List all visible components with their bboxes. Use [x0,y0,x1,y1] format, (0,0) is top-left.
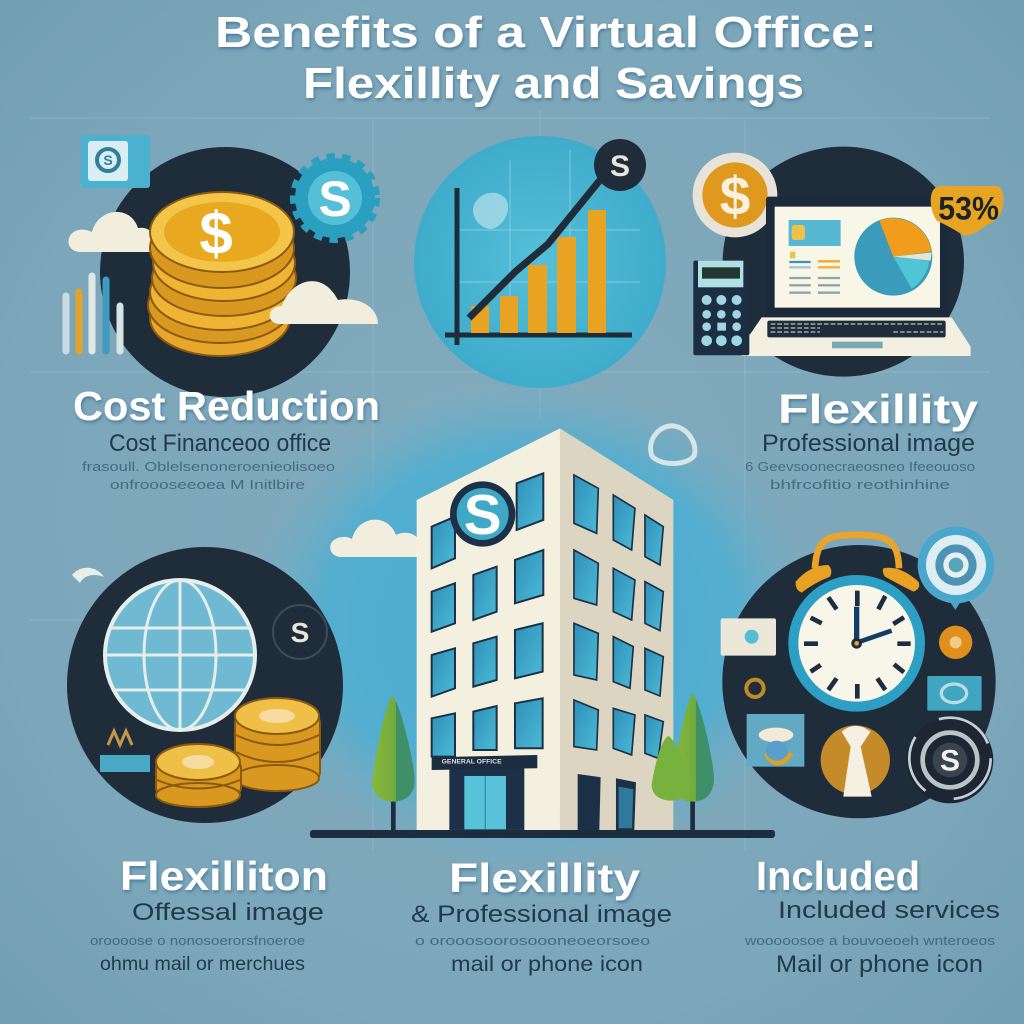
icon: calculator [693,261,749,355]
heading block: included services: Included services [778,897,1000,924]
icon: left coin stack [156,744,241,807]
icon: dollar coin [273,605,327,659]
icon: dollar coin: $ [720,165,750,227]
heading block: cost reduction [73,383,380,492]
icon: tie [821,725,890,797]
heading block: cost reduction: Cost Reduction [73,383,380,429]
title [215,8,877,108]
icon: dollar coin: S [291,617,309,648]
icon: teal card [927,676,982,711]
left windows [432,473,543,757]
heading block: flexibility centre: o orooosoorosoooneoeorsoeo [415,933,650,948]
title: Flexillity and Savings [303,59,804,108]
heading block: flexibility centre: & Professional image [411,901,672,928]
heading block: flexibility centre: Flexillity [449,855,640,901]
icon: swirl coin: S [940,745,960,778]
ground line [310,830,775,838]
panel: cost reduction icon [66,135,378,397]
heading block: cost reduction: Cost Financeoo office [109,430,331,457]
keyboard base [742,317,971,356]
teal circle [414,136,666,388]
tree left [372,696,415,830]
heading block: flexibility lower left: oroooose o nonosoerorsfnoeroe [90,933,305,948]
panel: building [245,380,815,870]
tower faces [417,428,560,830]
bars [471,210,606,333]
icon: small bars [66,276,120,351]
heading block: included services: wooooosoe a bouvoeoeh wnteroeos [744,933,996,948]
heading block: included services: Mail or phone icon [776,951,983,978]
icon: teal card [100,731,150,772]
icon: gear with dollar [295,158,375,238]
right windows [574,475,663,758]
heading block: flexibility top right: Flexillity [778,386,978,432]
icon: target pin [918,527,994,610]
heading block: flexibility centre: mail or phone icon [451,953,643,976]
icon: swirl coin [907,717,993,803]
icon: white card [721,618,776,656]
icon: right cloud [270,281,378,324]
icon: left cloud [68,212,155,252]
heading block: included services [744,853,1000,978]
title: Benefits of a Virtual Office: [215,8,877,57]
dark circle [67,547,343,823]
icon: globe [105,580,255,730]
screen list [789,220,841,293]
icon: dollar coin: S [610,150,630,183]
icon: orange coin [939,626,972,659]
icon: coin stack [148,192,296,356]
icon: laptop [742,197,971,356]
panel: growth chart icon [414,136,666,388]
icon: small leaf [72,568,104,583]
trend line [469,180,600,318]
icon: cap photo [747,714,804,767]
entrance [432,755,537,830]
icon: small card [81,135,150,188]
panel: cost reduction icon: $ [199,200,233,267]
panel: laptop icon [693,147,1003,377]
icon: dollar coin [594,139,646,191]
chart axes [445,188,632,345]
heading block: flexibility lower left: ohmu mail or merchues [100,954,305,975]
icon: alarm clock [793,535,920,707]
icon: small gold ring [746,680,764,697]
dark circle [100,147,350,397]
pie chart [854,218,932,296]
heading block: cost reduction: onfroooseeoea M Initlbire [110,477,305,492]
dark circle [723,147,964,377]
dark circle [722,545,996,818]
halo [245,380,815,870]
heading block: flexibility top right: Professional image [762,430,975,457]
icon: dollar sign badge [450,481,515,547]
icon: dollar coin [693,153,777,237]
icon: right coin stack [235,698,320,791]
percentage badge: 53% [938,190,999,226]
icon: gear with dollar: S [318,171,352,227]
heading block: included services: Included [756,853,920,899]
trees right [652,694,714,830]
heading block: flexibility centre [411,855,672,976]
icon: dollar sign badge: S [464,484,502,547]
heading block: cost reduction: frasoull. Oblelsenoneroenieolisoeo [82,459,335,474]
heading block: flexibility lower left [90,853,328,975]
icon: small card: S [103,152,113,168]
heading block: flexibility lower left: Offessal image [132,899,324,926]
heading block: flexibility top right: 6 Geevsoonecraeosneo Ifeeouoso [745,459,975,474]
side doors [578,774,636,830]
panel: clock icon [721,527,996,818]
icon: small ring [651,426,695,464]
heading block: flexibility top right [745,386,978,492]
icon: globe mark [473,193,508,229]
heading block: flexibility lower left: Flexilliton [120,853,328,899]
heading block: flexibility top right: bhfrcofitio reothinhine [770,477,950,492]
panel: globe icon [67,547,343,823]
icon: cloud [330,520,426,557]
entrance: GENERAL OFFICE [442,760,502,766]
percentage badge [931,186,1003,235]
